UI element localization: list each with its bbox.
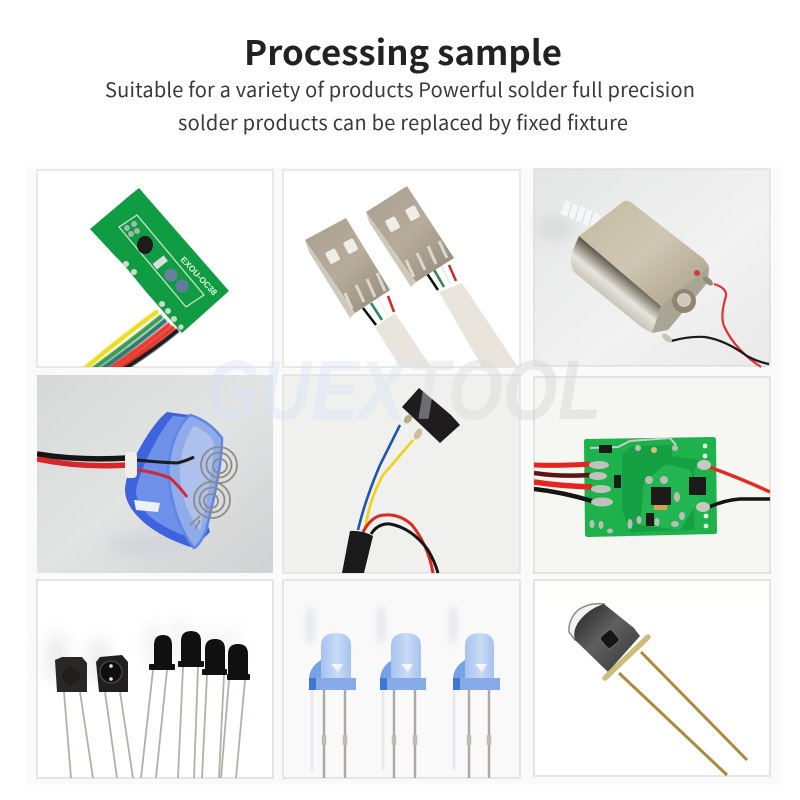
lens shadow [105,535,195,555]
subtitle text block: solder products can be replaced by fixed fixture [178,107,628,136]
cable wires [37,454,127,466]
flat sensor A [55,657,87,692]
USB plug left [305,218,390,313]
sensor leads [64,667,245,778]
panel: micro switch with wires [283,375,520,573]
panel: green controller board [534,377,770,573]
soft shadows [48,620,236,680]
board [584,437,717,537]
panel: gold lead phototransistor [534,580,770,776]
white spring tube [563,207,598,222]
LED B [380,633,426,778]
watermark: GUEXTOOL [205,343,601,437]
switch body [402,388,460,443]
panel: blue LEDs [283,580,520,778]
switch wires [358,425,438,573]
subtitle text block: Suitable for a variety of products Powerful solder full precision [105,74,695,103]
motor wires [671,284,769,367]
panel: USB connectors [283,170,520,367]
LED shadows [305,605,458,645]
motor end face [652,266,709,333]
USB wires [363,264,456,325]
flat sensor B [96,655,128,692]
black cable sleeve [342,531,373,573]
motor top face [579,201,709,306]
circuit board [90,188,229,333]
metal can [574,604,640,672]
page background panel [27,167,780,785]
round sensors [149,631,250,680]
subtitle text block [105,74,695,136]
panel: DC motor [534,169,770,367]
motor side face [571,236,661,333]
USB plug right [366,186,454,282]
board wires left [534,464,592,501]
lens body [125,412,222,548]
panel: green PCB with ribbon wires: EXOU-OC38 [179,255,220,297]
LED A [309,633,356,778]
LED C [453,633,500,778]
ribbon wires [84,311,178,369]
USB cables [375,313,431,367]
contact springs [190,447,237,529]
flange [605,637,648,678]
title: Processing sample [244,26,562,75]
can window [599,628,620,650]
cream band [535,581,769,599]
soft shadow [537,216,573,240]
panel: blue lens with springs [37,375,273,573]
gold leads [619,652,747,775]
lens dome [569,604,604,640]
panel: green PCB with ribbon wires [37,170,273,369]
board wires right [709,467,770,507]
panel: infrared sensors [37,580,273,778]
